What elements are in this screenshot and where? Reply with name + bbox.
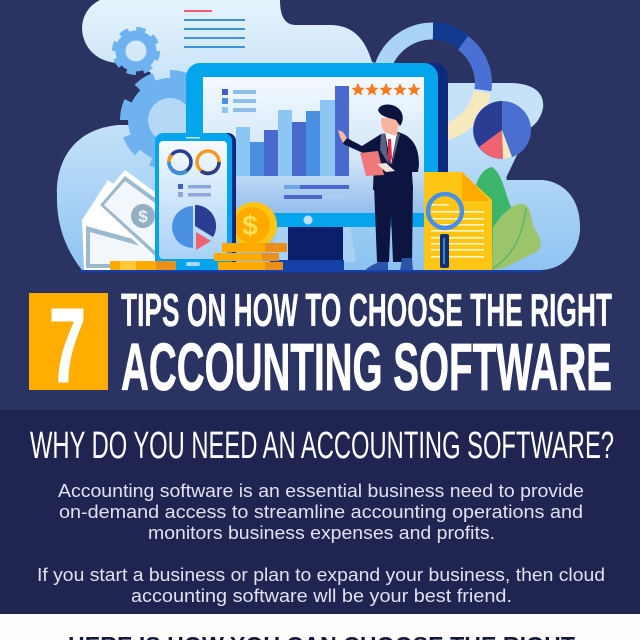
ground line xyxy=(80,270,542,272)
icon: large gear xyxy=(126,76,214,164)
title xyxy=(121,284,612,405)
gold coin: $ xyxy=(242,210,258,241)
donut chart xyxy=(381,31,483,132)
clipboard xyxy=(360,151,384,176)
shirt and tie xyxy=(385,132,397,165)
pie chart xyxy=(473,101,531,159)
legs xyxy=(374,185,413,262)
banknotes: $ xyxy=(138,207,148,226)
leaves xyxy=(475,167,541,270)
monitor xyxy=(186,63,448,270)
bar chart xyxy=(236,86,349,176)
phone legend xyxy=(178,184,211,197)
icon: magnifier xyxy=(428,194,462,268)
panel: white lower section xyxy=(0,614,640,640)
body paragraph two: If you start a business or plan to expand your business, then cloud xyxy=(37,565,605,585)
rating stars xyxy=(352,83,420,96)
report lines xyxy=(184,10,245,48)
panel: why accounting software xyxy=(0,410,640,614)
lapels xyxy=(380,133,400,165)
businessman xyxy=(338,104,419,271)
document with magnifier xyxy=(424,172,492,270)
banknotes xyxy=(82,170,155,270)
body paragraph two xyxy=(37,565,605,606)
body paragraph one: on-demand access to streamline accounting operations and xyxy=(59,502,583,522)
hair xyxy=(378,104,403,126)
monitor stand xyxy=(270,227,356,270)
ring charts xyxy=(169,151,219,174)
pointing hand xyxy=(338,130,347,143)
hero illustration xyxy=(57,0,580,272)
screen legend xyxy=(222,89,256,113)
icon: small gear xyxy=(115,30,157,72)
body paragraph one xyxy=(58,481,584,543)
body paragraph two: accounting software wll be your best friend. xyxy=(131,586,512,606)
screen text bars xyxy=(284,185,349,199)
holding hand xyxy=(377,163,395,172)
body paragraph one: Accounting software is an essential business need to provide xyxy=(58,481,584,501)
face xyxy=(381,118,399,136)
badge: number 7: 7 xyxy=(49,287,86,405)
body paragraph one: monitors business expenses and profits. xyxy=(148,523,495,543)
jacket xyxy=(343,132,419,190)
shoes xyxy=(365,258,413,271)
phone pie xyxy=(172,205,216,250)
smartphone xyxy=(155,133,236,270)
gold coin xyxy=(231,202,277,248)
coin stacks xyxy=(110,243,287,270)
cloud backdrop xyxy=(57,0,580,270)
